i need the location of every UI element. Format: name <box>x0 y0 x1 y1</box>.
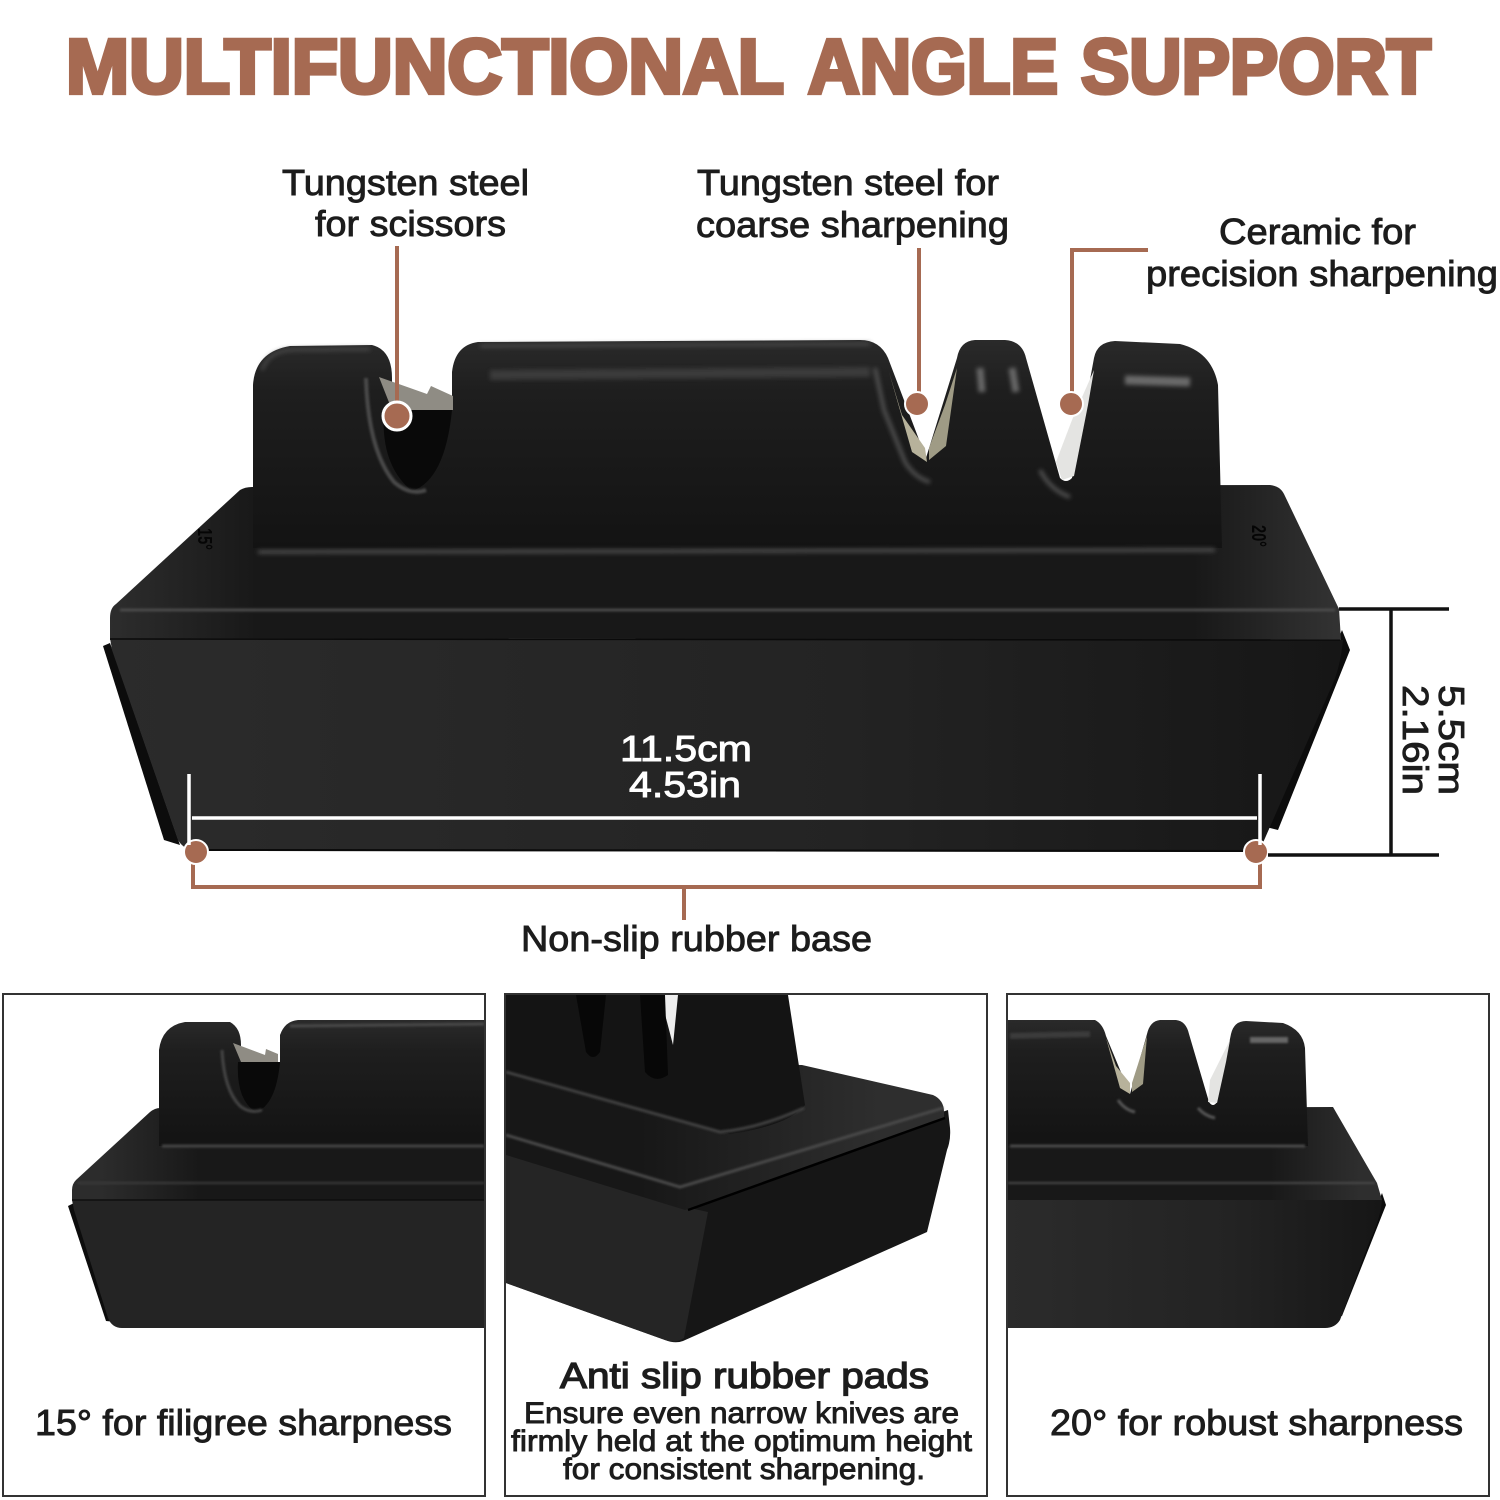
panel: rubber pads <box>505 994 987 1496</box>
height dimension: 5.5cm <box>1431 685 1472 795</box>
caption body: for consistent sharpening. <box>563 1453 925 1486</box>
height dimension: 2.16in <box>1395 685 1436 795</box>
panel: 15 degree <box>3 994 485 1496</box>
caption body <box>511 1397 973 1486</box>
title: ANGLE <box>808 24 1058 110</box>
label: ceramic: Ceramic for <box>1219 211 1416 252</box>
label: scissors <box>282 162 529 244</box>
main product: sharpener: 20° <box>1247 525 1269 547</box>
label: coarse: Tungsten steel for <box>697 162 999 203</box>
ceramic insert <box>1056 370 1094 480</box>
caption: 15° for filigree sharpness <box>35 1402 452 1443</box>
base label: Non-slip rubber base <box>521 918 872 959</box>
label: ceramic <box>1146 211 1498 294</box>
main product: sharpener <box>103 340 1350 852</box>
callout leaders <box>193 246 1260 920</box>
label: scissors: Tungsten steel <box>282 162 529 203</box>
title: MULTIFUNCTIONAL <box>66 24 784 110</box>
scissors blade <box>379 377 453 410</box>
caption body: Ensure even narrow knives are <box>524 1397 959 1430</box>
caption: 20° for robust sharpness <box>1050 1402 1463 1443</box>
width dimension: 11.5cm <box>620 728 752 769</box>
body highlights <box>258 344 1215 552</box>
embossed angle marks: 15° <box>193 528 215 550</box>
caption body: firmly held at the optimum height <box>511 1425 973 1458</box>
base top face <box>110 485 1341 640</box>
width dimension <box>189 728 1260 845</box>
label: ceramic: precision sharpening <box>1146 253 1498 294</box>
scissors slot <box>384 410 452 491</box>
rubber pads <box>103 643 180 845</box>
height dimension <box>1268 609 1472 855</box>
label: scissors: for scissors <box>315 203 506 244</box>
panel: 20 degree <box>1007 994 1489 1496</box>
sharpening body <box>253 340 1222 548</box>
title: SUPPORT <box>1081 24 1431 110</box>
callout dots <box>184 392 1268 864</box>
width dimension: 4.53in <box>629 764 741 805</box>
label: coarse: coarse sharpening <box>696 204 1009 245</box>
base front face <box>110 638 1343 852</box>
caption heading: Anti slip rubber pads <box>560 1355 929 1396</box>
label: coarse <box>696 162 1009 245</box>
base edge highlights <box>120 608 1335 612</box>
title <box>66 24 1431 110</box>
coarse blades <box>889 372 927 462</box>
